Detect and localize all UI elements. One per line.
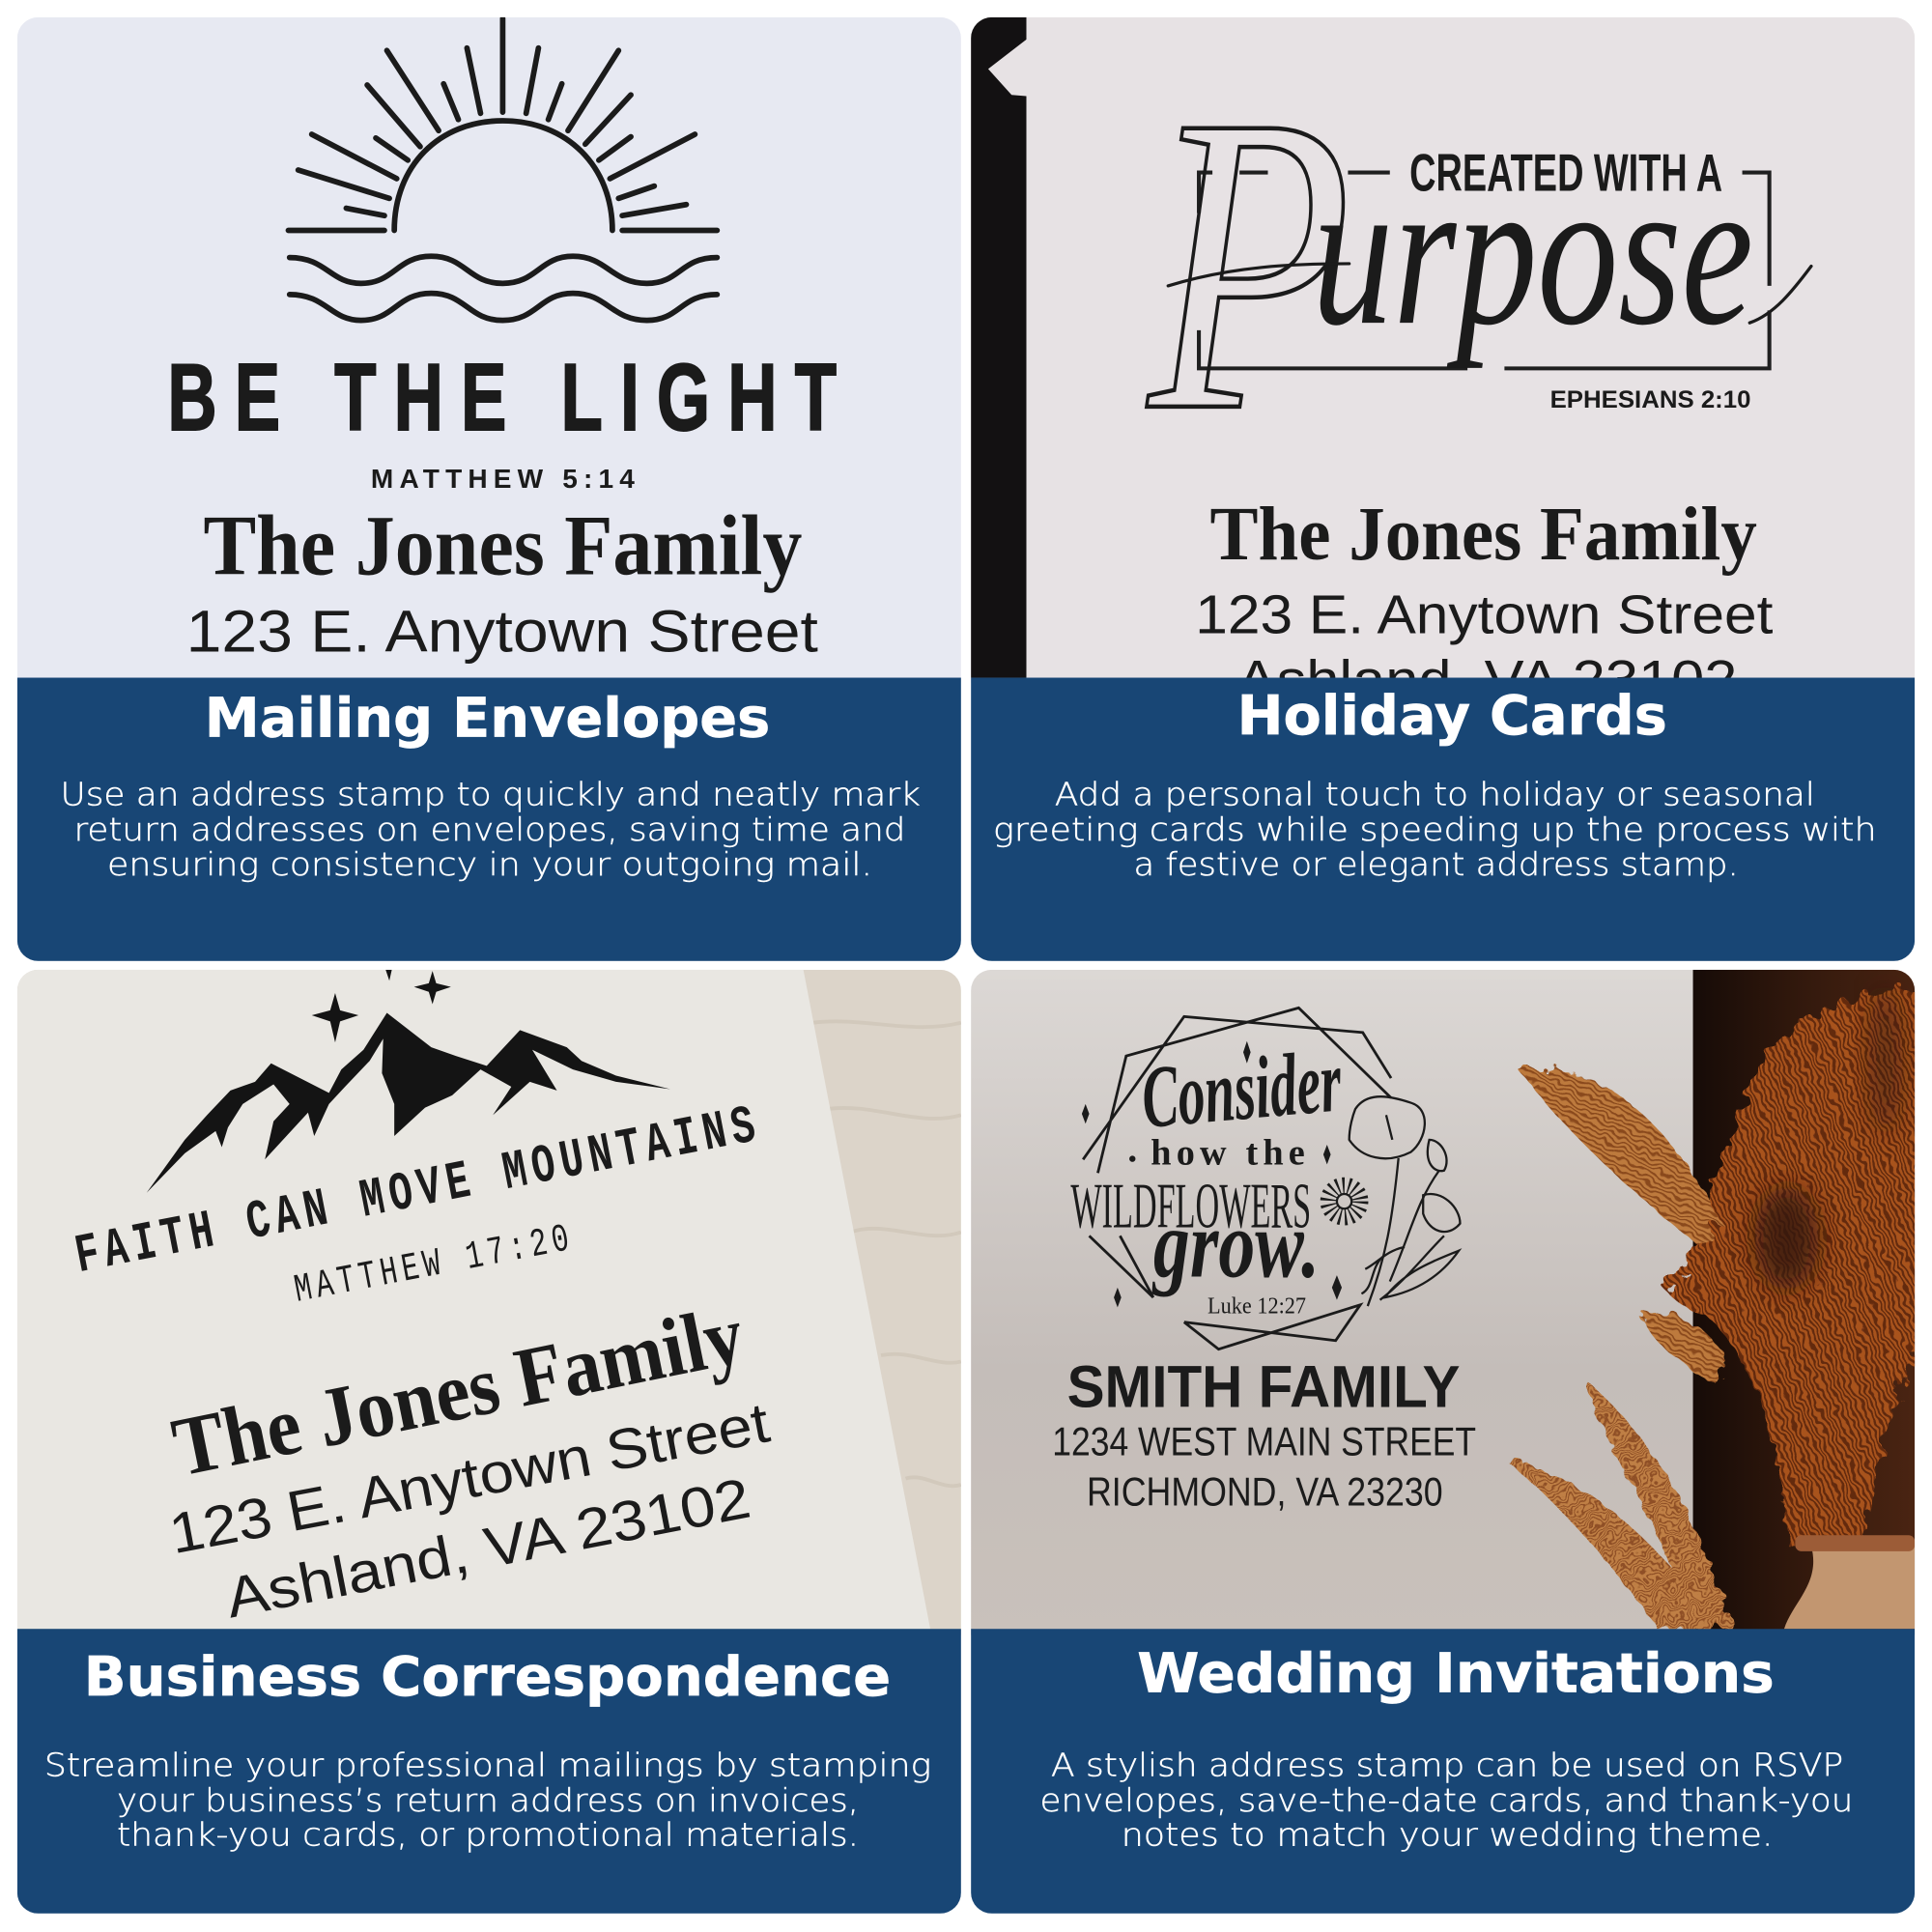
caption background <box>971 678 1915 961</box>
stamp slogan top: CREATED WITH A <box>1409 143 1722 203</box>
description: a festive or elegant address stamp. <box>1133 845 1739 883</box>
script swash <box>1168 264 1811 323</box>
panel: business correspondence <box>17 970 961 1914</box>
street address: 123 E. Anytown Street <box>1195 584 1774 645</box>
panel: mailing envelopes <box>17 17 961 961</box>
family name: The Jones Family <box>1210 493 1757 577</box>
icon: mountains <box>147 1012 670 1193</box>
scripture reference: MATTHEW 17:20 <box>291 1216 573 1313</box>
description: thank-you cards, or promotional materials. <box>117 1816 859 1854</box>
heading: Mailing Envelopes <box>205 688 770 751</box>
script word: grow: grow. <box>1151 1190 1320 1297</box>
description <box>44 1747 931 1854</box>
dark wood panel <box>1693 970 1915 1635</box>
street address: 123 E. Anytown Street <box>164 1391 774 1566</box>
stamp slogan: BE THE LIGHT <box>167 346 837 451</box>
icon: copper vase <box>1784 1535 1915 1629</box>
photo background: wall <box>971 970 1915 1635</box>
geometric wreath frame <box>1083 1008 1391 1350</box>
word: WILDFLOWERS: WILDFLOWERS <box>1070 1171 1311 1241</box>
street address: 123 E. Anytown Street <box>186 599 818 665</box>
script word: Consider: Consider <box>1138 1031 1346 1147</box>
family name: The Jones Family <box>165 1288 751 1494</box>
icon: stars <box>312 970 451 1042</box>
panel: holiday cards <box>971 17 1915 961</box>
description: your business’s return address on invoices, <box>117 1781 859 1819</box>
description: ensuring consistency in your outgoing mail. <box>107 845 872 883</box>
stamp slogan: FAITH CAN MOVE MOUNTAINS <box>71 1095 760 1288</box>
city line: RICHMOND, VA 23230 <box>1087 1469 1443 1515</box>
script word: P <box>1143 29 1351 499</box>
icon: sun over waves <box>288 18 717 321</box>
photo background: paper <box>971 17 1915 683</box>
description: Streamline your professional mailings by stamping <box>44 1747 931 1784</box>
description: greeting cards while speeding up the process with <box>993 810 1877 848</box>
description: A stylish address stamp can be used on RSVP <box>1051 1747 1843 1784</box>
description: envelopes, save-the-date cards, and thank-you <box>1040 1781 1853 1819</box>
heading: Wedding Invitations <box>1137 1642 1775 1705</box>
icon: wildflowers <box>1328 1096 1460 1306</box>
stamp frame <box>1199 173 1770 368</box>
family name: SMITH FAMILY <box>1067 1354 1460 1420</box>
script word: urpose <box>1312 135 1753 369</box>
caption background <box>17 1629 961 1914</box>
city line: Ashland, VA 23102 <box>221 1467 755 1631</box>
words: how the: how the <box>1151 1132 1305 1173</box>
street address: 1234 WEST MAIN STREET <box>1052 1418 1476 1463</box>
scripture reference: Luke 12:27 <box>1208 1293 1306 1320</box>
city line, clipped: Ashland, VA 23102 <box>1237 649 1737 710</box>
caption background <box>17 678 961 961</box>
paper sheet <box>17 970 930 1629</box>
wood grain <box>813 1021 961 1486</box>
plumes: pampas grass <box>1506 985 1922 1629</box>
scripture reference: EPHESIANS 2:10 <box>1550 386 1750 413</box>
photo background: paper <box>17 17 961 683</box>
description: notes to match your wedding theme. <box>1122 1816 1773 1854</box>
dark edge with torn notch <box>971 17 1026 678</box>
caption background <box>971 1629 1915 1914</box>
photo background: wood <box>17 970 961 1635</box>
heading: Business Correspondence <box>84 1646 891 1709</box>
family name: The Jones Family <box>203 497 802 593</box>
panel: wedding invitations <box>971 970 1922 1914</box>
description: Add a personal touch to holiday or seasonal <box>1055 776 1815 813</box>
description: return addresses on envelopes, saving time and <box>74 810 905 848</box>
scripture reference: MATTHEW 5:14 <box>371 464 635 494</box>
description: Use an address stamp to quickly and neatly mark <box>60 776 921 813</box>
sparkles <box>1082 1041 1342 1307</box>
description <box>60 776 921 883</box>
description <box>1040 1747 1853 1854</box>
heading: Holiday Cards <box>1237 685 1667 748</box>
description <box>993 776 1877 883</box>
